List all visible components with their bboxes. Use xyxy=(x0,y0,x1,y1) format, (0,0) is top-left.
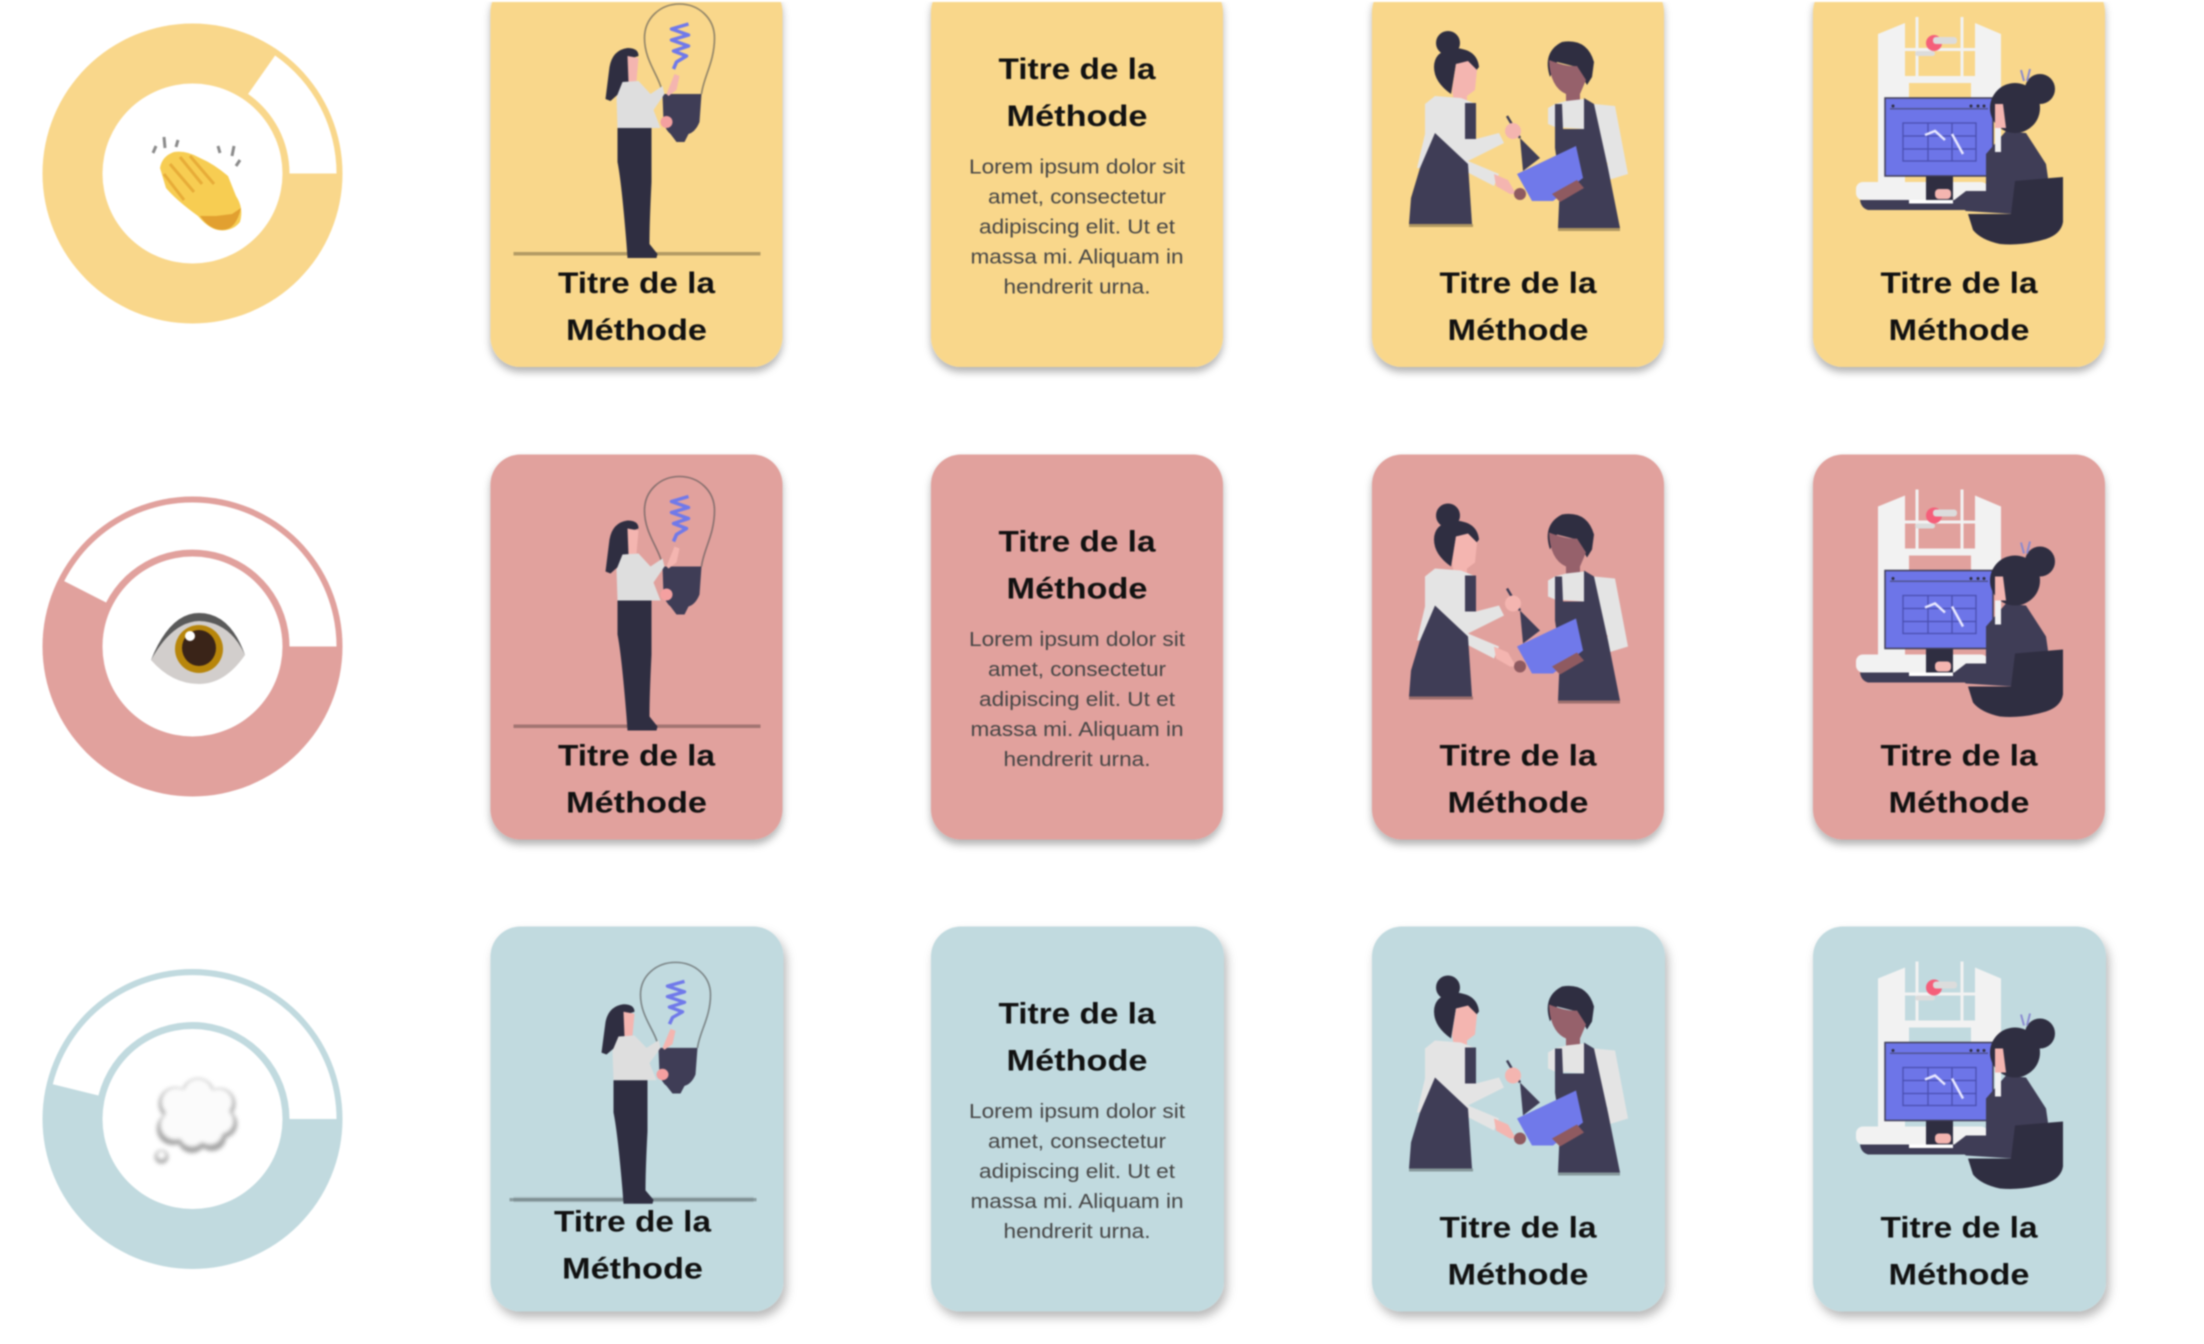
panel: yellow card, bulb: Titre de la xyxy=(558,267,715,300)
panel: blue card, text: adipiscing elit. Ut et xyxy=(979,1161,1175,1183)
panel: yellow card, team xyxy=(1372,0,1664,367)
panel: yellow card, team: Titre de la xyxy=(1440,267,1597,300)
panel: pink card, bulb: Méthode xyxy=(566,786,707,820)
panel: blue card, text: amet, consectetur xyxy=(988,1131,1166,1153)
icon: pink progress ring with eye xyxy=(42,496,342,796)
panel: pink card, team xyxy=(1372,454,1664,840)
panel: blue card, text: Lorem ipsum dolor sit xyxy=(969,1101,1185,1123)
panel: pink card, bulb xyxy=(490,454,782,840)
panel: pink card, text: Méthode xyxy=(1006,572,1148,606)
panel: pink card, team: Titre de la xyxy=(1440,740,1597,772)
panel: yellow card, bulb: Méthode xyxy=(566,314,707,347)
panel: pink card, text: massa mi. Aliquam in xyxy=(970,719,1183,741)
panel: yellow card, computer: Titre de la xyxy=(1880,267,2038,300)
panel: pink card, computer: Titre de la xyxy=(1880,740,2038,772)
panel: yellow card, text: massa mi. Aliquam in xyxy=(970,246,1183,268)
panel: blue card, bulb xyxy=(490,926,784,1312)
panel: blue card, text: Titre de la xyxy=(998,998,1156,1030)
panel: yellow card, text: adipiscing elit. Ut et xyxy=(979,216,1175,238)
panel: blue card, text: Méthode xyxy=(1006,1044,1148,1078)
panel: blue card, computer: Titre de la xyxy=(1880,1212,2038,1244)
panel: yellow card, text: Lorem ipsum dolor sit xyxy=(969,156,1185,178)
icon: blue progress ring with thought bubble xyxy=(42,969,342,1269)
panel: pink card, text: adipiscing elit. Ut et xyxy=(979,689,1175,711)
panel: blue card, text: massa mi. Aliquam in xyxy=(970,1191,1183,1213)
panel: pink card, text: amet, consectetur xyxy=(988,659,1166,681)
icon: eye xyxy=(151,613,245,684)
panel: pink card, bulb: Titre de la xyxy=(558,740,715,772)
panel: pink card, text: Titre de la xyxy=(998,526,1156,558)
panel: pink card, text: hendrerit urna. xyxy=(1004,749,1150,771)
panel: yellow card, text: amet, consectetur xyxy=(988,186,1166,208)
panel: blue card, team: Méthode xyxy=(1448,1258,1588,1292)
panel: blue card, bulb: Méthode xyxy=(562,1252,703,1286)
panel: blue card, computer xyxy=(1813,926,2106,1312)
icon: thought bubble xyxy=(155,1078,237,1164)
panel: yellow card, text xyxy=(931,0,1223,367)
panel: yellow card, computer xyxy=(1813,0,2105,367)
panel: yellow card, text: hendrerit urna. xyxy=(1004,276,1150,298)
panel: yellow card, text: Méthode xyxy=(1006,100,1148,133)
panel: pink card, computer: Méthode xyxy=(1888,786,2030,820)
panel: blue card, team: Titre de la xyxy=(1440,1212,1597,1244)
panel: blue card, team xyxy=(1372,926,1665,1312)
panel: yellow card, computer: Méthode xyxy=(1888,314,2030,347)
panel: yellow card, bulb xyxy=(490,0,782,367)
panel: blue card, computer: Méthode xyxy=(1888,1258,2030,1292)
panel: yellow card, text: Titre de la xyxy=(998,53,1156,86)
panel: blue card, text: hendrerit urna. xyxy=(1004,1221,1150,1243)
panel: yellow card, team: Méthode xyxy=(1448,314,1588,347)
panel: blue card, bulb: Titre de la xyxy=(554,1206,711,1238)
panel: pink card, computer xyxy=(1813,454,2105,840)
panel: blue card, text xyxy=(931,926,1224,1312)
panel: pink card, text: Lorem ipsum dolor sit xyxy=(969,629,1185,651)
panel: pink card, text xyxy=(931,454,1223,840)
icon: clapping hands xyxy=(153,137,241,230)
panel: pink card, team: Méthode xyxy=(1448,786,1588,820)
icon: yellow progress ring with clapping hands xyxy=(42,24,342,324)
